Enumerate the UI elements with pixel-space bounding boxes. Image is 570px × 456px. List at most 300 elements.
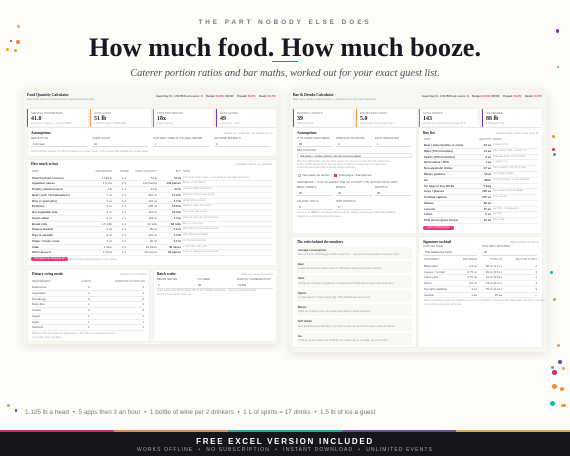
mix note [297, 211, 395, 218]
cocktail table rows: 75 oz (2.2 L) [486, 287, 502, 291]
food table rows: Weigh when cooked [183, 198, 205, 202]
buy list rows: Non-alcoholic drinks [424, 166, 453, 170]
panel: bar assumptions [293, 128, 416, 233]
rule: soft drinks [297, 318, 412, 331]
food table rows: Petite or plated mini dessert jars [183, 250, 219, 253]
dietary table rows: 2 [88, 285, 90, 289]
panel: buy list: Updates bottle counts to your guest list [496, 132, 539, 135]
buy list header: ITEM [424, 138, 430, 140]
buy list rows: 88 lb [484, 178, 491, 182]
rule: mixers [297, 304, 412, 316]
cocktail table rows: 1 [535, 275, 537, 279]
cocktail table rows: 3 oz [472, 287, 477, 291]
batch scaler fields: 4 [158, 283, 160, 287]
panel: assumptions: Assumptions [31, 131, 51, 135]
buy list rows: 1 case 6 × 24 [493, 143, 508, 146]
dietary footnote [32, 332, 116, 339]
kpi: apps: 18x [157, 116, 166, 122]
food table rows: 2 oz [107, 239, 112, 243]
food table rows: 3 oz [107, 216, 112, 220]
table header: BUY [176, 170, 181, 173]
button: shopping list [31, 257, 68, 261]
buy list rows: Four a guest [493, 195, 507, 198]
dietary table rows: Halal [32, 320, 39, 324]
kpi: total drinks: Rounds up to bottle sizes, average 20 P [423, 122, 465, 125]
buy list rows: Mixers (quarts) [424, 172, 445, 176]
panel: rules behind the numbers [293, 237, 416, 347]
food table rows: 5.1 lb [174, 239, 181, 243]
bar category select: Standard + Coffee (drinks: Not all recommended) [300, 154, 361, 158]
buy list header [424, 138, 502, 140]
food table rows: 3 oz [107, 233, 112, 237]
kpi: cake slices: 1 per guest + 10% [220, 122, 239, 125]
button caption: Print ready shopping sheet for your caterer [70, 258, 117, 260]
bar category select [297, 153, 412, 158]
buy list rows: Cups / glasses [424, 189, 444, 193]
cocktail table rows: 1 [535, 270, 537, 274]
buy list rows: 10 ea [484, 218, 491, 222]
batch scaler fields: 45 [198, 283, 201, 287]
dietary table rows: 2 [142, 302, 144, 306]
panel: assumptions: 1 [155, 142, 157, 146]
cocktail fields: 25 [484, 250, 487, 254]
status badges: Prepaid: $5,250 [503, 95, 521, 98]
sheet heading: Bar & Drinks Calculator [293, 93, 334, 97]
panel: bar assumptions: BEER / CIDER % [297, 186, 317, 189]
panel: signature cocktail: Batch a pitcher for the bar [510, 241, 539, 244]
food table rows: 5.1 lb [174, 227, 181, 231]
food table rows: Soft, hard, and one blue cheese [183, 227, 218, 230]
cocktail table rows: Citrus juice [424, 275, 438, 279]
sheet subheading: How much food to provide based on guest and menu style [27, 98, 94, 101]
cocktail table rows: 13 oz (0.4 L) [486, 281, 502, 285]
table header: PARTY QUANTITY [136, 170, 157, 173]
food table rows: Potatoes [32, 204, 44, 208]
food table rows: 1:1 [122, 176, 126, 180]
panel: signature cocktail: Signature cocktail [423, 240, 451, 244]
food table rows: Chips / crisps / nuts [32, 239, 59, 243]
food table rows: 1:1 [122, 222, 126, 226]
buy list rows: 37 ea [484, 143, 491, 147]
rule: ice: Ice [298, 335, 302, 338]
cocktail fields [423, 245, 537, 256]
cocktail table rows: 19 oz (0.6 L) [486, 270, 502, 274]
kpi: drinks per guest [356, 109, 417, 127]
buy list rows: Cans sparkle + the 20 % bars [493, 166, 526, 169]
panel: dietary swing meals: Swing the mix to fit diets [120, 273, 147, 276]
panel: batch scaler [154, 270, 276, 341]
buy list rows: Limes [424, 212, 432, 216]
table header: SHARE [120, 170, 129, 173]
subtitle: Caterer portion ratios and bar maths, worked out for your exact guest list. [130, 68, 440, 79]
status badges [156, 95, 276, 98]
food table rows: 82 oz [150, 227, 157, 231]
panel: assumptions: 41 [94, 142, 97, 146]
food table rows [32, 176, 273, 256]
kpi: ice needed: 1.5 lb/guest × 55 [486, 122, 504, 125]
rule: beer: Beer [298, 263, 304, 266]
food table rows: Other dessert [32, 250, 51, 254]
panel: assumptions: Change any yellow cell, rest updates for you [224, 132, 273, 135]
buy list rows: Two a guest, plus breakage [493, 189, 524, 192]
dietary table rows: 1 [142, 320, 144, 324]
rules of thumb line: 1.125 lb a head • 5 apps then 3 an hour • 1 bottle of wine per 2 drinkers • 1 L of spirits = 17 drinks • 1.5 lb of ice a guest [25, 409, 376, 416]
buy list rows: per 100 – 1 wedge/cup [493, 207, 518, 210]
food table rows: 1:1 [122, 210, 126, 214]
food table rows: For the long evening [183, 239, 206, 242]
buy list rows: Straws [424, 201, 433, 205]
dietary table rows: Vegan [32, 314, 40, 318]
cocktail table rows: 25 ea [495, 292, 502, 296]
batch scaler fields [157, 278, 273, 289]
cocktail note: mix so it's an easy pour at the bar. [424, 303, 462, 306]
food table rows: Dressed, allow for lots of greens [183, 216, 219, 219]
panel: assumptions: Full meal [33, 142, 44, 146]
cocktail table header: TOTAL OZ [490, 258, 502, 261]
kpi: drinking guests: DRINKING GUESTS [297, 112, 323, 115]
buy list rows: Ice bags to buy (20 lb) [424, 184, 454, 188]
buy list rows: per 200 [493, 212, 501, 215]
kpi: total drinks: TOTAL DRINKS [423, 112, 443, 115]
food table rows: 3.5 pcs [103, 181, 112, 185]
food table rows: 1:1 [122, 181, 126, 185]
buy list rows: Lemons [424, 207, 435, 211]
buy list rows: Ice [424, 178, 428, 182]
food table rows: Appetizer pieces [32, 181, 55, 185]
food table rows: 1:1 [122, 244, 126, 248]
buy list header: NOTES [493, 138, 502, 140]
panel: signature cocktail [419, 237, 542, 347]
cocktail table rows: 38 oz (1.1 L) [486, 264, 502, 268]
dietary table rows: Seafood [32, 325, 43, 329]
food table rows: 205 oz [148, 204, 157, 208]
panel: bar assumptions: % OF GUESTS WHO DRINK [297, 137, 330, 140]
food table rows: Total food (all courses) [32, 176, 64, 180]
buy list rows: 16 qt [484, 172, 491, 176]
panel: assumptions: HOW MANY TIMES IS THE MEAL SERVED [153, 137, 202, 140]
cocktail table rows: 1.5 oz [469, 264, 477, 268]
rule: spirits: 1 L has about 17 mixed drinks. Big, 750 ml bottles are less handy [298, 296, 370, 299]
food table rows: Two sides split evenly [183, 210, 207, 213]
food table rows: 1:1 [122, 216, 126, 220]
cocktail table rows: Syrup [424, 281, 432, 285]
food table rows: 123 oz [148, 198, 157, 202]
food table rows: 62 rolls [171, 222, 181, 226]
food table rows: 1:1 [122, 239, 126, 243]
dietary table rows: 1 [88, 314, 90, 318]
rule: mixers: Mixers [298, 306, 307, 309]
dietary table rows: 3 [88, 308, 90, 312]
food table rows: 1 lb [107, 187, 112, 191]
batch scaler fields: RECIPE SERVES [157, 278, 177, 281]
food table rows: 17.9 lb [172, 193, 181, 197]
food table rows: 62 pieces [168, 250, 181, 254]
food table rows: 5 oz [107, 204, 112, 208]
batch scaler fields: 11.25x [238, 283, 246, 287]
cocktail fields: COCKTAIL NAME [423, 245, 443, 248]
food table rows: 287 oz [148, 193, 157, 197]
food table rows: Cake [32, 244, 39, 248]
food table rows: Poultry, whole bone-in [32, 187, 63, 191]
dietary table rows: 1 [142, 325, 144, 329]
eyebrow: THE PART NOBODY ELSE DOES [198, 19, 372, 26]
button: shopping list [423, 226, 454, 230]
batch scaler note: Scale spices and salt by about 75% of the multiplier and taste — they do not scale linearly. [157, 289, 257, 292]
panel: bar assumptions: BAR CATEGORY [297, 149, 317, 152]
food table rows: 1:1 [122, 198, 126, 202]
food table rows: 62 rolls [148, 222, 157, 226]
kpi: cake slices: 49 [220, 116, 226, 122]
status badges: Food source: 41 [450, 95, 469, 98]
rule: spirits [297, 290, 412, 302]
panel: buy list: Buy list [423, 131, 435, 135]
panel: bar assumptions: 5 [338, 205, 340, 209]
assumptions explanation [297, 160, 390, 169]
buy list rows: Essential picks, at 17 per litre [493, 155, 526, 158]
cocktail table rows: 19 oz (0.6 L) [486, 275, 502, 279]
panel: bar assumptions: 95 [299, 142, 302, 146]
table header [32, 170, 190, 173]
panel: bar assumptions: DRINKS 1ST HOUR (HR) [336, 137, 365, 140]
panel: bar assumptions: 25 [377, 191, 380, 195]
panel: assumptions: GUEST COUNT [92, 137, 110, 140]
rule: average consumption [297, 246, 412, 259]
kpi: drinks per guest: Event length: 3h, average rate 1 [360, 122, 394, 125]
buy list rows: Tonic/cola in gallon [493, 172, 514, 175]
food table rows: Green salad [32, 216, 49, 220]
dietary table rows: 2 [142, 296, 144, 300]
food table rows: 7.7 lb [174, 198, 181, 202]
panel: assumptions: Total food (all courses) is 1.125 lb a head at a sit-down meal · 1 lb if served with a buffet and smaller sides [31, 150, 148, 152]
buy list header: QUANTITY [479, 138, 492, 140]
cocktail table rows: 0.75 oz [468, 275, 477, 279]
rule: soft drinks: Zero alcohol guests still drink 1 per hour or more are served for toasts + after the drinks [298, 325, 395, 328]
cocktail fields: HOW MANY (BATCHES) [482, 245, 510, 248]
kpi: total food: 51 lb [94, 116, 107, 122]
panel: bar assumptions: DRINKER MIX — % OF ALL DRINKS THAT GO TO EACH TYPE (SHOULD TOTAL 100%) [297, 181, 397, 184]
cocktail note: Batch everything except the sparkling top up to 4 hrs ahead. A cocktail in the fridge stays cold and in the right [424, 299, 544, 302]
rule: beer: A case has 24 cans; stock in tubs or chill boxes during arriving at a discount [298, 267, 382, 270]
status badges: Ready: $1,750 [259, 95, 276, 98]
food table rows: 41 lb [174, 187, 181, 191]
food table rows: 2 oz [107, 227, 112, 231]
buy list rows [424, 143, 538, 224]
rule: wine: Wine [298, 277, 304, 280]
buy list rows: Spirits (750 ml bottles) [424, 155, 455, 159]
status badges: Food source: 41 [184, 95, 203, 98]
kpi: servings: SERVING PARAMETERS [31, 112, 63, 115]
cocktail table rows [424, 264, 537, 298]
panel: assumptions: 0 [216, 142, 218, 146]
table header: PER PERSON [96, 170, 112, 173]
food table rows: Roast or carved meat weight [183, 193, 215, 196]
food table rows: 142 pieces [166, 181, 181, 185]
food table rows: 1:1 [122, 187, 126, 191]
panel: how much to buy [28, 160, 276, 265]
food table rows: 1:1 [122, 193, 126, 197]
kpi: servings [27, 109, 88, 127]
dietary table rows [32, 285, 145, 331]
dietary table rows: Kosher [32, 308, 41, 312]
kpi: ice needed: 88 lb [486, 116, 499, 122]
rule: beer [297, 261, 412, 273]
panel: assumptions: LEFTOVER BUFFER % [214, 137, 241, 140]
panel: bar assumptions: SPIRITS % [375, 186, 388, 189]
dietary table rows: 4 [88, 291, 90, 295]
panel: batch scaler: Batch scaler [157, 272, 176, 276]
food table rows: Before or as starters [183, 181, 206, 184]
panel: rules behind the numbers: The rules behind the numbers [297, 240, 343, 244]
dietary table header: REQUIREMENT [32, 280, 50, 282]
kpi: servings: 41.0 [31, 116, 42, 122]
food table rows: 51 lb [174, 176, 181, 180]
cocktail table rows: 1 [535, 281, 537, 285]
buy list rows: Four a kid [493, 218, 504, 221]
buy list rows: Wine (750 ml bottles) [424, 149, 453, 153]
kpi: total food: TOTAL FOOD [94, 112, 111, 115]
panel: assumptions: SERVE STYLE [31, 137, 48, 140]
cocktail table header: BOTTLES TO BUY [516, 258, 537, 261]
cocktail table header [424, 258, 537, 261]
batch scaler fields: MULTIPLY INGREDIENTS BY [237, 278, 271, 281]
panel: bar assumptions: EACH HOUR AFTER [375, 137, 399, 140]
buy list rows: Two 44 lb bags, ice-box included [493, 178, 529, 181]
kpi: apps: 5 apps a guest [157, 122, 173, 125]
cocktail table rows: 3 [535, 287, 537, 291]
status badges: Guest Day 10 · 1:00 PM [422, 95, 450, 98]
panel: dietary swing meals: Dietary swing meals [32, 272, 63, 276]
dietary table header: GUESTS [81, 280, 91, 282]
assumptions explanation: notice. A 25% margin is the pro rule that's on hand so bottles don't run out for the [297, 163, 386, 166]
food table rows: 142 pieces [143, 181, 157, 185]
panel: assumptions [28, 128, 276, 156]
food table rows: 62 pieces [145, 250, 157, 254]
buy list rows: 66 ea [484, 201, 491, 205]
food table rows: 1 slice [104, 244, 112, 248]
panel: bar assumptions: 2 [338, 142, 340, 146]
food table rows: Dips & spreads [32, 233, 53, 237]
buy list rows: 170 ea [482, 195, 491, 199]
cocktail table rows: Liqueur / cordial [424, 270, 445, 274]
kpi: ice needed: ICE NEEDED [486, 112, 503, 115]
rule: spirits: Spirits [298, 292, 306, 295]
cocktail table rows: — [534, 292, 537, 296]
buy list rows: Cocktail napkins [424, 195, 447, 199]
panel: bar assumptions: WINE % [336, 186, 345, 189]
table header: NOTE [183, 170, 190, 173]
dietary table rows: Vegetarian [32, 291, 46, 295]
panel: bar assumptions: 30 [299, 191, 302, 195]
food table rows: 3 oz [107, 198, 112, 202]
food table rows: Buy in mixed trays [183, 222, 203, 224]
batch scaler note [157, 289, 257, 296]
status badges: Budget: $1,500 / $8,500 [472, 95, 500, 98]
dietary table rows: 4 [142, 291, 144, 295]
dietary table rows: Nut allergy [32, 296, 46, 300]
dietary table rows: 1 [88, 325, 90, 329]
dietary table header [32, 280, 145, 282]
cocktail table header: INGREDIENT [424, 258, 439, 261]
food table rows: 1.5 rolls [102, 222, 112, 226]
food table rows: 7.7 lb [174, 216, 181, 220]
food table rows: 12.8 lb [172, 204, 181, 208]
food table rows: 164 oz [148, 210, 157, 214]
food table rows: 1.125 lb [102, 176, 112, 180]
rule: soft drinks: Soft drinks [298, 320, 312, 323]
cocktail table rows: Top with sparkling [424, 287, 447, 291]
buy list rows: Hard seltzer / RTD [424, 160, 449, 164]
dietary table rows: 1 [88, 320, 90, 324]
assumptions explanation: crowd and the extra bottle is almost always returned. [297, 166, 355, 169]
food table rows: The whole meal, mains + everything on the plate combined [183, 176, 248, 178]
table header: ITEM [32, 170, 38, 173]
cocktail note [424, 299, 544, 306]
panel: batch scaler: Scale any recipe to the party [241, 273, 273, 276]
dietary footnote: run smaller than standard. [32, 336, 61, 339]
food table rows: 10.3 lb [172, 210, 181, 214]
food table rows: 1:1 [122, 233, 126, 237]
kpi: drinking guests: 39 [297, 116, 303, 122]
cocktail table header: PER SERVE [463, 258, 477, 261]
status badges: Budget: $1,500 / $8,500 [206, 95, 234, 98]
batch scaler fields: YOU NEED [197, 278, 210, 281]
kpi: drinking guests [293, 109, 353, 127]
food table rows: 1 slice plus extra 10% [183, 244, 207, 248]
food table rows: 7.7 lb [174, 233, 181, 237]
kpi: total drinks [419, 109, 478, 127]
colour stripe [0, 430, 570, 432]
sheet: bar and drinks calculator [290, 90, 547, 352]
assumptions explanation: Plan for a 25% buffer over the bar's needs; if a round runs short it's cold guests that [297, 160, 389, 163]
buy list rows: Beer / cider (bottles or cans) [424, 143, 463, 147]
food table rows: 1:1 [122, 204, 126, 208]
food table rows: 123 oz [148, 216, 157, 220]
cocktail fields: The Gatehouse Spritz [425, 250, 452, 254]
batch scaler note: Cooking times barely move too. [157, 293, 192, 296]
sheet heading: Food Quantity Calculator [27, 93, 69, 97]
food table rows: Mash or roast, raw weight [183, 204, 212, 207]
food table rows: 7 oz [107, 193, 112, 197]
kpi: drinks per guest: DRINKS PER GUEST [360, 112, 387, 115]
kpi: ice needed [482, 109, 542, 127]
panel: bar assumptions: 35 [338, 191, 341, 195]
cocktail table rows: 2 [535, 264, 537, 268]
buy list rows: 1 case 6 × 4 [493, 160, 507, 163]
kpi: total drinks: 143 [423, 116, 432, 122]
rule: ice: 1.5 lb per guest covers 1 hr of drinks; for a warm day or no fridge, go to 2 lb each [298, 339, 388, 342]
kpi: cake slices: CAKE SLICES [220, 112, 238, 115]
food table rows: 1.5 pcs [103, 250, 112, 254]
panel: bar assumptions: SOFT DRINKS % [336, 200, 356, 203]
sheet: food quantity calculator [24, 90, 278, 344]
food table rows: With pitta and crudites [183, 233, 208, 236]
kpi: servings: 41 guests × 1 apps × 1 hours at 100% [31, 122, 71, 125]
dietary footnote: Reserve 10% more than the head count — the caterer's special meals often [32, 332, 116, 335]
rule: mixers: A pint per 3 spirits pours; one quart goes about 3 drinks total tops [298, 310, 370, 313]
status badges: Prepaid: $5,250 [237, 95, 255, 98]
food table rows: Beef / pork / fish (boneless) [32, 193, 70, 197]
rule: wine [297, 275, 412, 288]
panel: bar assumptions: 1 [377, 142, 379, 146]
dietary table rows: 2 [142, 285, 144, 289]
cocktail table rows: 0.5 oz [469, 281, 477, 285]
checkbox: champagne toast: Champagne / Toast planned [339, 174, 371, 176]
food table rows: 41 lb [151, 187, 157, 191]
rule: average consumption: Average consumption [298, 249, 326, 252]
buy list rows: 3 ea [485, 155, 491, 159]
button: shopping list: Download the shopping list [34, 257, 65, 260]
mix note: Listed up to 100% so bar figures always add up. Swap a beer-heavy crowd with wedding [297, 211, 395, 214]
